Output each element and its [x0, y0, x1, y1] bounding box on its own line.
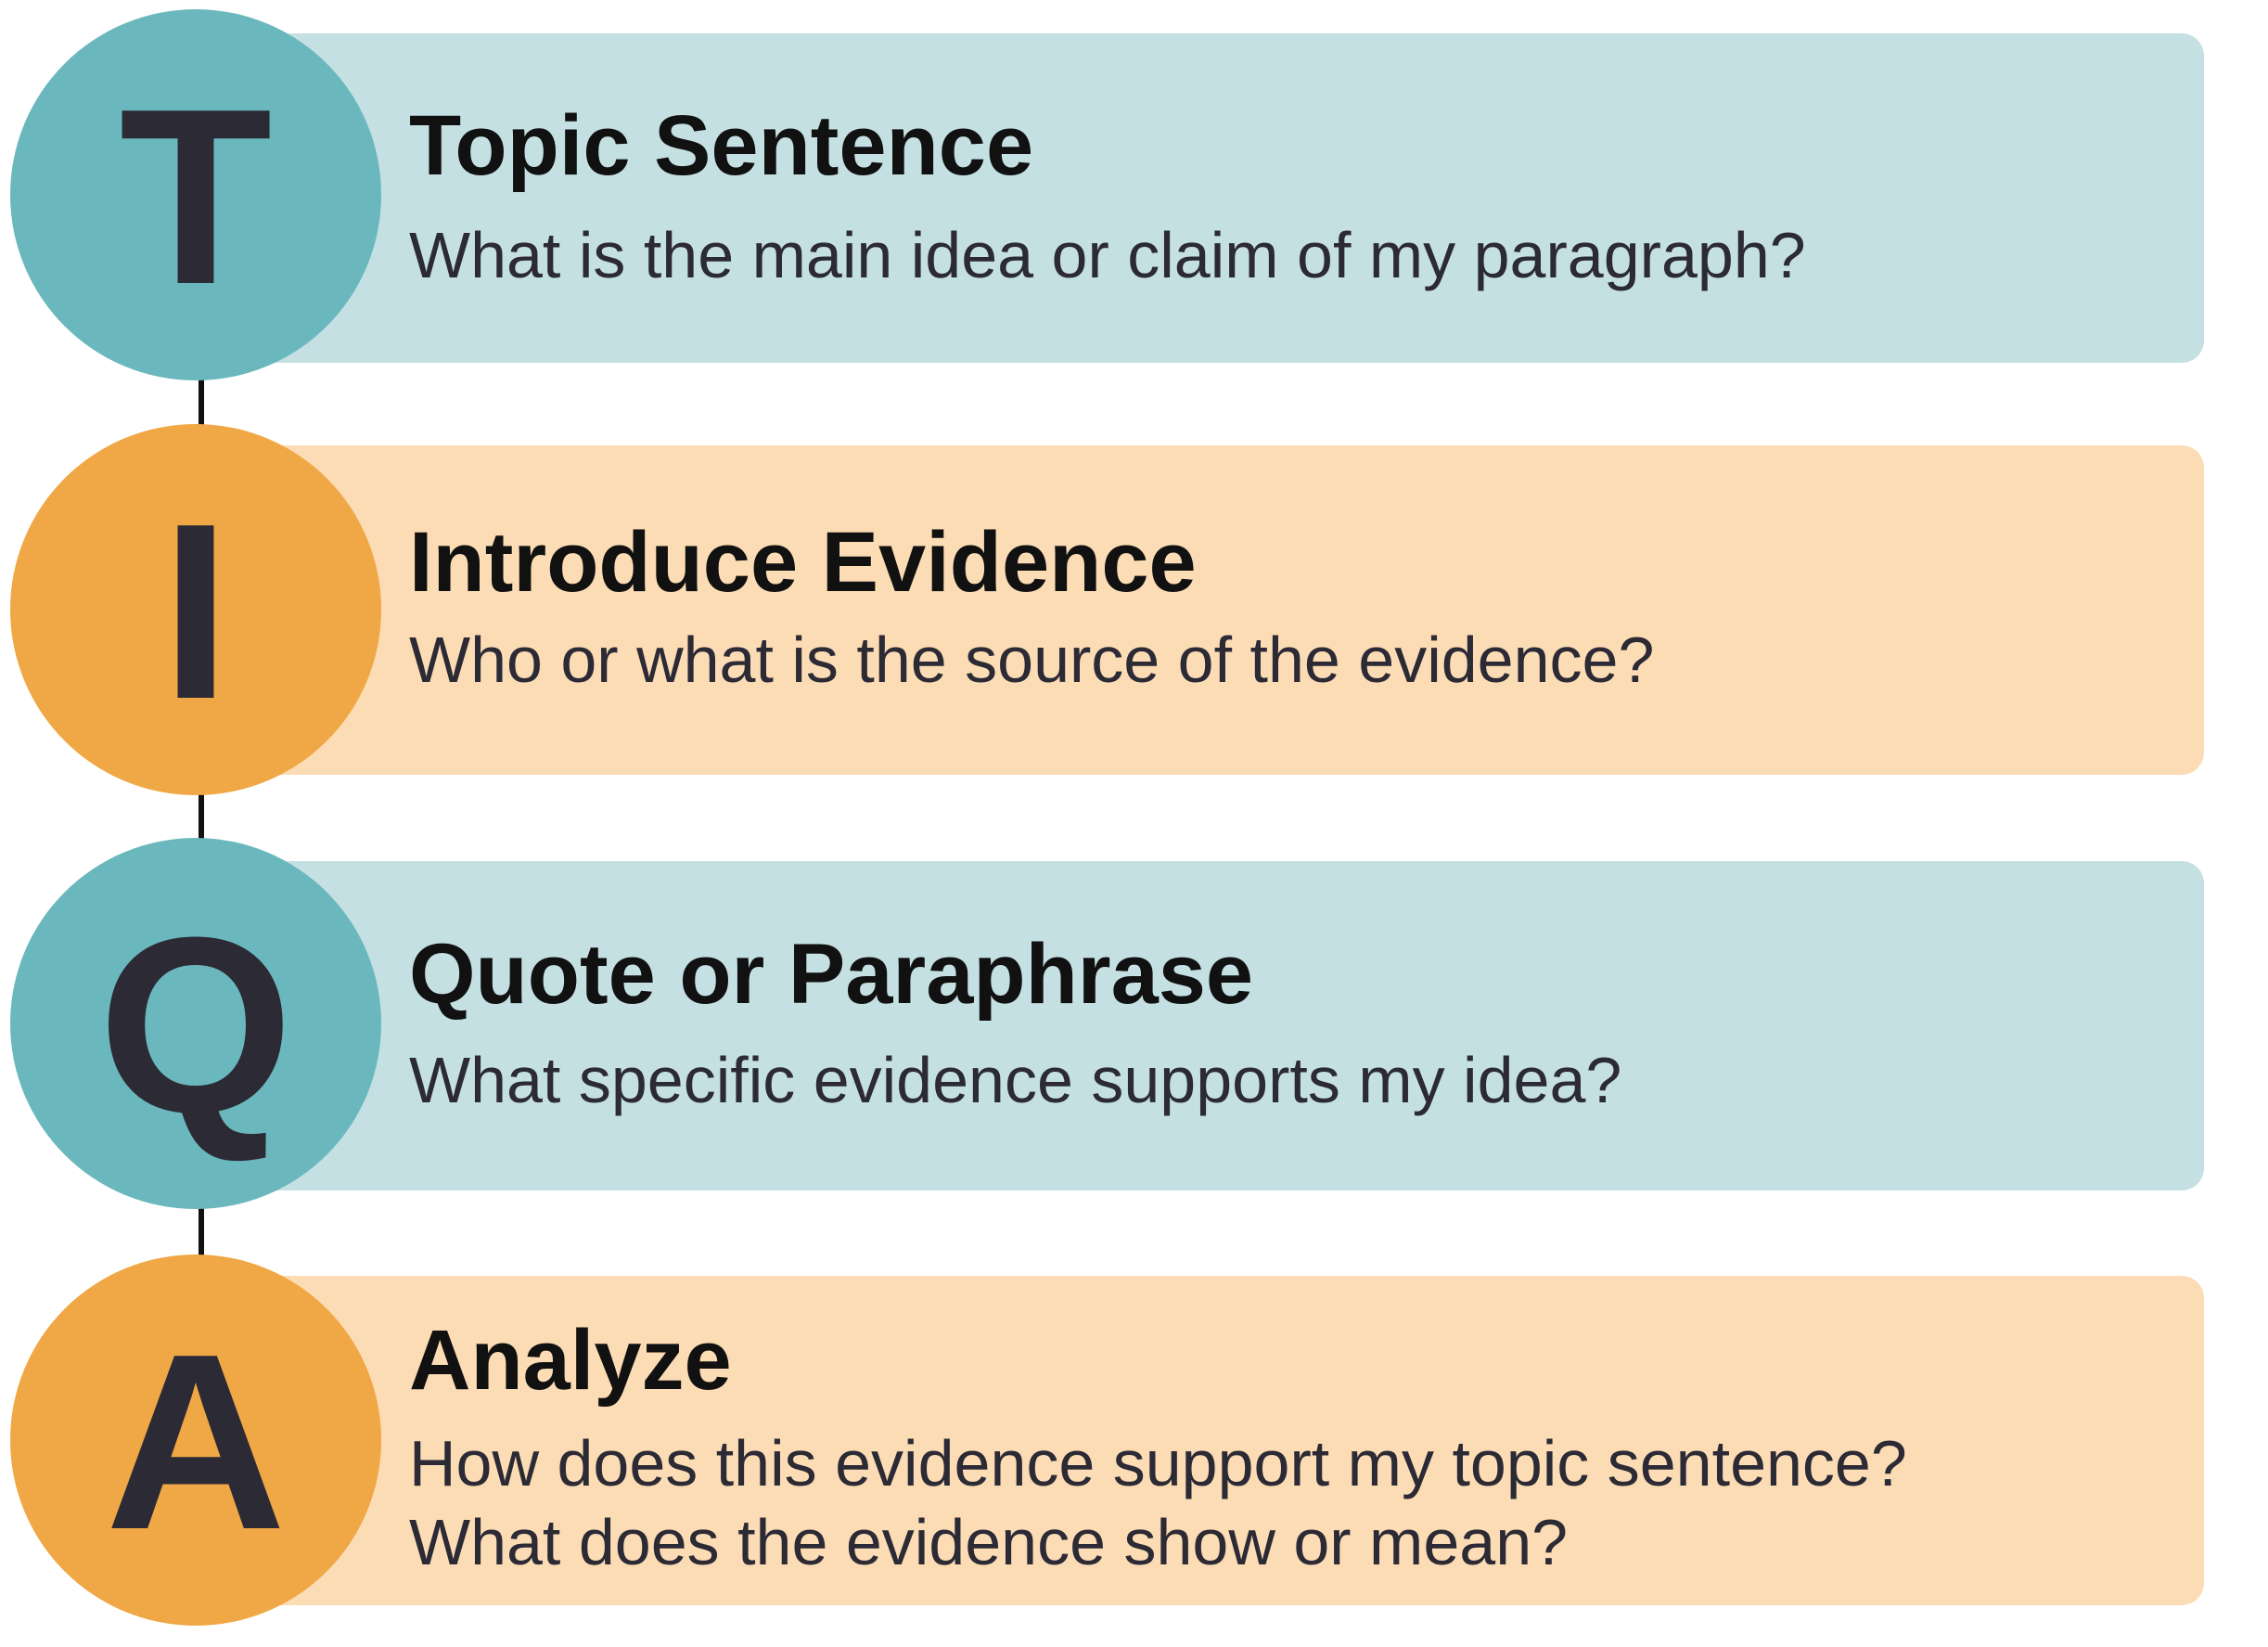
panel: introduce evidence — [219, 445, 2204, 775]
circle: T — [10, 9, 381, 380]
connector line — [199, 371, 204, 1299]
circle: I — [10, 424, 381, 795]
panel: topic sentence — [219, 33, 2204, 363]
circle: Q: Q — [98, 886, 293, 1165]
text: analyze questions — [409, 1427, 1907, 1578]
text: analyze questions: What does the evidence show or mean? — [409, 1506, 1568, 1578]
panel: analyze — [219, 1276, 2204, 1605]
circle: A: A — [106, 1303, 286, 1582]
text: quote question: What specific evidence supports my idea? — [409, 1044, 1621, 1116]
circle: T: T — [120, 58, 272, 337]
circle: Q — [10, 838, 381, 1209]
text: introduce question: Who or what is the source of the evidence? — [409, 624, 1654, 696]
heading: Topic Sentence: Topic Sentence — [409, 98, 1033, 193]
text: topic question: What is the main idea or claim of my paragraph? — [409, 219, 1806, 291]
circle: I: I — [160, 472, 230, 752]
heading: Analyze: Analyze — [409, 1313, 732, 1408]
text: analyze questions: How does this evidence support my topic sentence? — [409, 1427, 1907, 1499]
heading: Quote or Paraphrase: Quote or Paraphrase — [409, 927, 1253, 1022]
circle: A — [10, 1255, 381, 1626]
panel: quote or paraphrase — [219, 861, 2204, 1190]
heading: Introduce Evidence: Introduce Evidence — [409, 515, 1197, 610]
